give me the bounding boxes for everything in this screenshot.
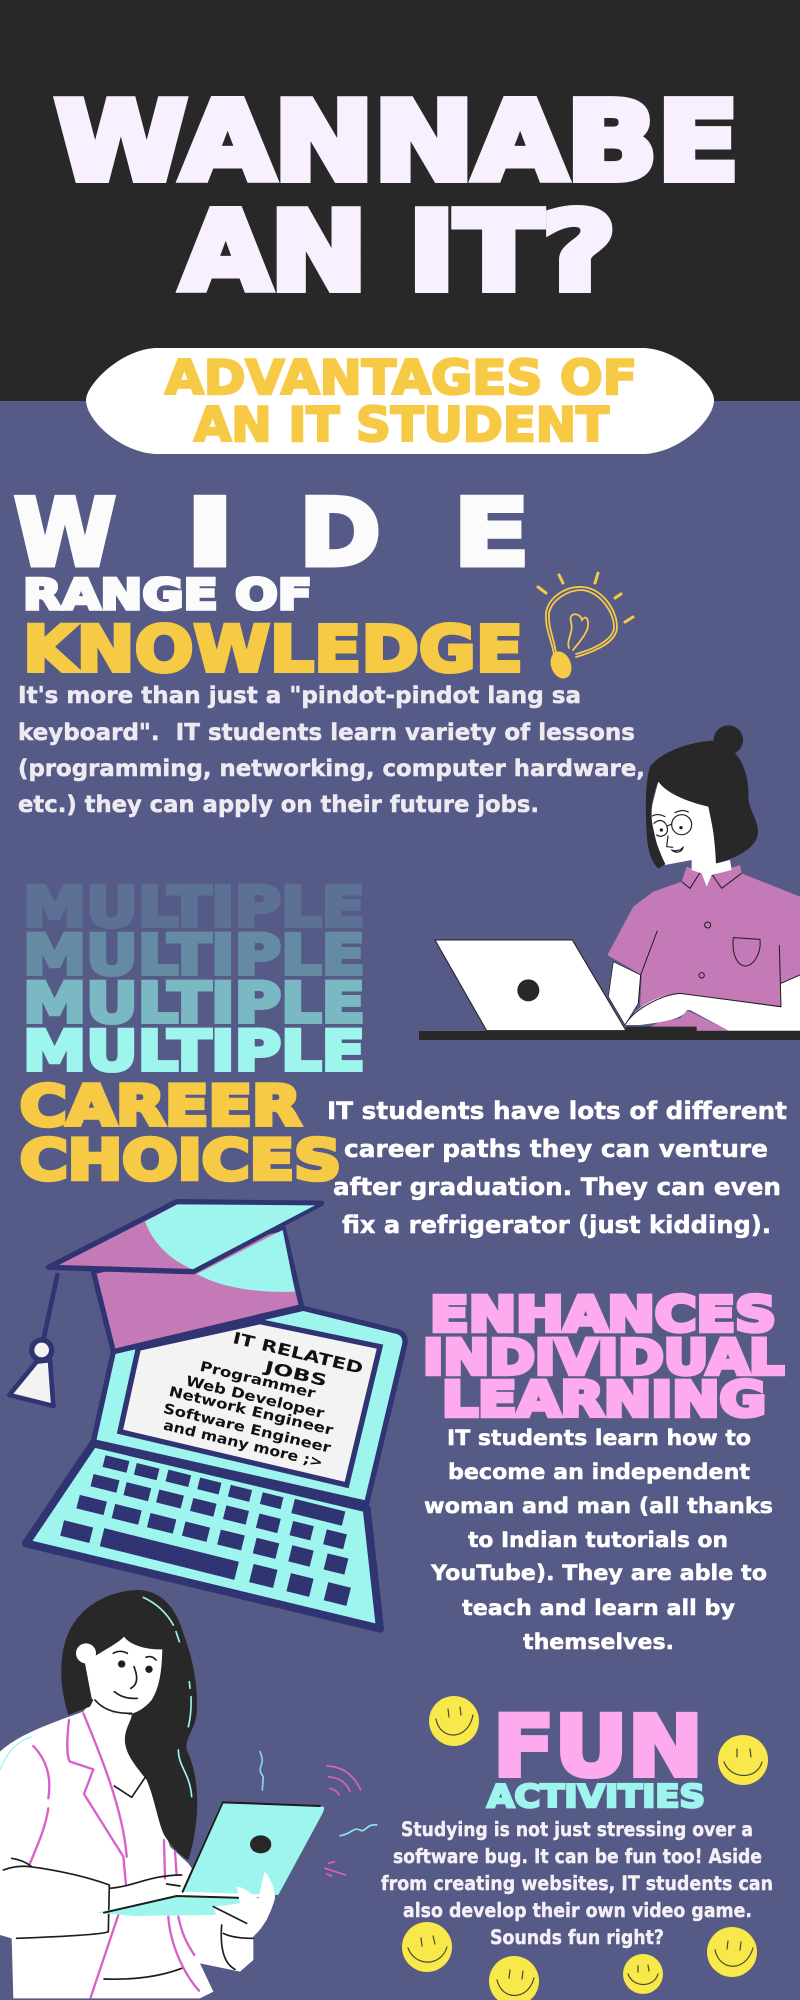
heading: enhances individual learning: ENHANCES <box>430 1287 776 1343</box>
heading: wide range of knowledge: KNOWLEDGE <box>23 613 523 686</box>
title: AN <box>181 190 367 315</box>
heading: multiple career choices: MULTIPLE <box>23 875 365 939</box>
heading: multiple career choices: MULTIPLE <box>23 971 365 1035</box>
text block: fun body <box>381 1818 773 1949</box>
heading: multiple career choices: MULTIPLE <box>23 1019 365 1083</box>
long hair <box>61 1590 197 1860</box>
heading: wide range of knowledge <box>14 479 530 686</box>
keys <box>60 1455 351 1606</box>
subtitle pill <box>86 348 714 454</box>
hand on laptop <box>213 1872 275 1938</box>
cyan laptop <box>97 1802 324 1916</box>
hair <box>646 741 758 868</box>
text block: knowledge body: keyboard". IT students learn variety of lessons <box>18 720 635 746</box>
screen text: IT related jobs: Web Developer <box>184 1373 326 1422</box>
text block: learning body: IT students learn how to <box>447 1426 751 1450</box>
body and jacket <box>0 1698 275 1998</box>
text block: knowledge body: It's more than just a "pindot-pindot lang sa <box>18 683 581 709</box>
text block: fun body: also develop their own video game. <box>403 1899 752 1922</box>
text block: fun body: Sounds fun right? <box>490 1926 664 1949</box>
illustration: woman holding cyan laptop <box>0 1590 377 1998</box>
heading: wide range of knowledge: RANGE OF <box>23 570 312 619</box>
text block: fun body: software bug. It can be fun too! Aside <box>393 1845 762 1868</box>
shirt <box>607 865 800 1007</box>
neck and face <box>650 782 732 887</box>
arms <box>608 962 641 1025</box>
illustration: woman with white laptop at desk <box>419 725 800 1040</box>
desk <box>419 1027 800 1040</box>
screen text: IT related jobs: IT RELATED <box>231 1328 365 1378</box>
text block: knowledge body: etc.) they can apply on their future jobs. <box>18 792 539 818</box>
heading: multiple career choices: CAREER <box>20 1074 301 1138</box>
heading: fun activities: ACTIVITIES <box>487 1779 705 1815</box>
icon: smiley right of fun <box>718 1735 768 1785</box>
screen text: IT related jobs: and many more ;> <box>162 1418 324 1471</box>
text block: learning body: to Indian tutorials on <box>468 1528 728 1552</box>
cap base <box>93 1228 302 1352</box>
icon: smiley bottom center left <box>489 1956 539 2000</box>
text block: learning body: become an independent <box>448 1460 750 1484</box>
cap top board <box>48 1202 322 1272</box>
screen text: IT related jobs: Network Engineer <box>167 1384 335 1439</box>
header: dark band <box>0 0 800 401</box>
laptop screen <box>93 1308 405 1503</box>
text block: learning body: woman and man (all thanks <box>424 1494 773 1518</box>
text block: career body: after graduation. They can even <box>333 1173 781 1201</box>
heading: wide range of knowledge: W <box>14 479 116 587</box>
text block: fun body: Studying is not just stressing over a <box>401 1818 753 1841</box>
icon: smiley bottom center right <box>623 1954 663 1994</box>
illustration: graduation cap on laptop <box>9 1202 405 1629</box>
screen text: IT related jobs <box>162 1328 365 1471</box>
title <box>55 80 739 315</box>
text block: learning body <box>424 1426 773 1654</box>
screen text: IT related jobs: Software Engineer <box>162 1401 332 1457</box>
subtitle pill: ADVANTAGES OF <box>165 351 637 406</box>
heading: enhances individual learning <box>423 1287 784 1428</box>
laptop keyboard deck <box>26 1443 380 1629</box>
text block: learning body: YouTube). They are able to <box>430 1561 767 1585</box>
heading: fun activities: FUN <box>493 1698 703 1796</box>
icon: smiley bottom right <box>707 1927 757 1977</box>
text block: knowledge body <box>18 683 645 818</box>
hair bun <box>714 725 743 755</box>
text block: learning body: teach and learn all by <box>462 1596 735 1620</box>
hair highlights <box>143 1597 192 1797</box>
text block: career body: fix a refrigerator (just kidding). <box>342 1211 771 1239</box>
title: IT? <box>408 190 616 315</box>
heading: enhances individual learning: LEARNING <box>442 1372 766 1428</box>
motion squiggles <box>260 1752 377 1876</box>
sleeve and clothing lines <box>3 1777 182 1979</box>
text block: career body: career paths they can venture <box>344 1135 768 1163</box>
heading: wide range of knowledge: I <box>185 479 235 587</box>
heading: wide range of knowledge: D <box>299 479 381 587</box>
background: purple panel <box>0 400 800 2000</box>
text block: learning body: themselves. <box>523 1630 674 1654</box>
text block: career body: IT students have lots of different <box>327 1097 787 1125</box>
title: WANNABE <box>55 80 739 205</box>
icon: smiley top left <box>429 1696 479 1746</box>
heading: multiple career choices: MULTIPLE <box>23 923 365 987</box>
screen text: IT related jobs: JOBS <box>262 1357 329 1390</box>
glasses and face details <box>652 811 692 852</box>
heading: multiple career choices: CHOICES <box>20 1128 341 1192</box>
heading: wide range of knowledge: E <box>453 479 530 587</box>
heading: multiple career choices <box>20 875 365 1192</box>
jacket magenta lines <box>30 1713 199 1997</box>
icon: light bulb <box>538 573 633 680</box>
text block: knowledge body: (programming, networking, computer hardware, <box>18 756 645 782</box>
tassel <box>9 1275 57 1406</box>
white laptop <box>435 940 626 1031</box>
subtitle pill: AN IT STUDENT <box>194 398 609 453</box>
heading: enhances individual learning: INDIVIDUAL <box>423 1330 784 1386</box>
icon: smiley bottom left <box>402 1922 452 1972</box>
face <box>76 1637 162 1715</box>
text block: career body <box>327 1097 787 1239</box>
screen text: IT related jobs: Programmer <box>198 1359 317 1402</box>
